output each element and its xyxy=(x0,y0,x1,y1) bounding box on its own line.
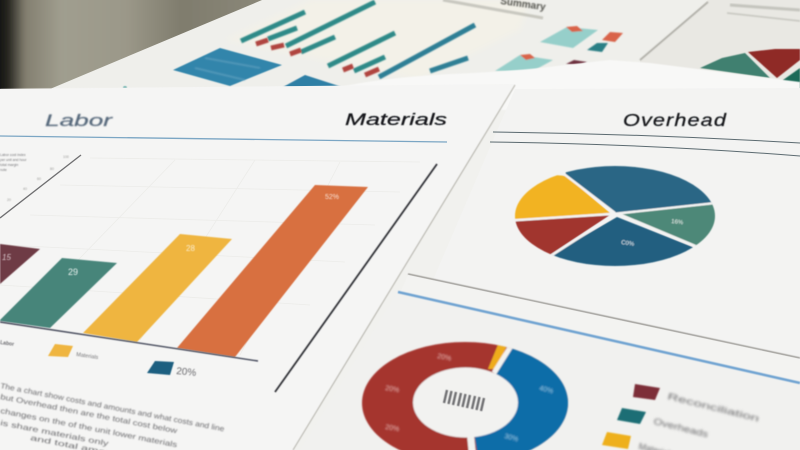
bar value: green: 29 xyxy=(68,267,78,277)
bar: maroon xyxy=(0,244,40,284)
bar value: yellow: 28 xyxy=(186,244,195,253)
pie slice: blue top xyxy=(565,165,712,213)
small blue box xyxy=(283,75,342,87)
donut legend xyxy=(602,384,760,450)
panel: back right sheet xyxy=(640,0,800,90)
small pale teal charts xyxy=(495,26,623,71)
y axis tick labels: 60 xyxy=(37,177,41,181)
pie slice: red xyxy=(515,214,610,255)
panel: middle sheet xyxy=(0,60,800,110)
legend label blue: 20% xyxy=(176,366,197,379)
x axis xyxy=(0,322,258,361)
body text paragraph xyxy=(0,381,225,450)
small teal dot xyxy=(123,86,127,90)
bar value: maroon: 15 xyxy=(2,253,11,262)
pie label green: 16% xyxy=(671,219,684,226)
donut chart xyxy=(360,340,570,450)
panel: bottom sheet xyxy=(360,275,800,450)
blue callout box xyxy=(173,48,282,86)
pie slice: green xyxy=(622,204,716,246)
legend swatch teal xyxy=(617,408,646,424)
y axis note text xyxy=(0,153,27,172)
panel: back left sheet xyxy=(50,0,800,100)
bar chart xyxy=(0,185,368,361)
grouped bar chart: teal bars xyxy=(241,2,475,77)
body text paragraph: is share materials only xyxy=(0,418,110,448)
blue header rule xyxy=(398,292,800,383)
legend swatch blue xyxy=(147,361,174,375)
overhead title: Overhead xyxy=(623,110,727,130)
donut label blue: 40% xyxy=(538,385,554,396)
grouped bar chart: red bars xyxy=(256,40,379,75)
legend label yellow: Materials xyxy=(76,352,99,361)
y axis tick labels: 20 xyxy=(7,198,11,202)
overhead pie chart xyxy=(514,165,716,267)
divider line dark xyxy=(275,164,437,392)
materials title: Materials xyxy=(345,111,447,129)
body text paragraph: changes on the of the unit lower materials xyxy=(0,406,178,449)
y axis xyxy=(0,155,81,218)
bar: green xyxy=(0,258,117,328)
chart grid xyxy=(0,158,420,355)
y axis tick labels: 40 xyxy=(23,187,27,191)
back sheet heading rule xyxy=(443,0,543,18)
table background xyxy=(0,0,290,105)
y axis note text: note xyxy=(0,168,7,172)
panel: front left sheet xyxy=(0,84,515,450)
bar: yellow xyxy=(83,234,232,342)
sheet divider line xyxy=(408,274,800,358)
donut label red lower: 20% xyxy=(385,385,400,394)
overhead header rules xyxy=(490,132,800,156)
bar: orange xyxy=(177,185,368,357)
panel: overhead sheet xyxy=(408,88,800,359)
donut label red: 20% xyxy=(437,353,452,363)
pie label blue: C0% xyxy=(621,240,635,248)
donut label red bottom: 20% xyxy=(385,424,400,433)
y axis note text: per unit and hour xyxy=(0,158,27,162)
bar value: orange: 52% xyxy=(325,194,339,201)
donut label blue lower: 30% xyxy=(503,433,519,444)
blue header rule xyxy=(0,136,447,142)
legend swatch gold xyxy=(602,432,631,449)
legend label left: Labor xyxy=(0,340,14,348)
back sheet grid shading xyxy=(225,0,530,80)
legend swatch maroon xyxy=(633,384,660,400)
y axis tick labels: 80 xyxy=(50,167,54,171)
legend swatch yellow xyxy=(48,344,73,357)
chart legend xyxy=(0,340,197,379)
body text paragraph: The a chart show costs and amounts and what costs and line xyxy=(0,381,225,433)
y axis note text: total margin xyxy=(0,163,18,167)
pie slice: dark blue xyxy=(552,216,694,267)
pie slice: yellow xyxy=(514,174,610,220)
back right pie chart xyxy=(700,49,800,90)
labor title: Labor xyxy=(45,112,114,130)
y axis note text: Labor cost index xyxy=(0,153,26,157)
body text paragraph: but Overhead then are the total cost below xyxy=(0,392,179,435)
legend label maroon: Reconciliation xyxy=(667,391,760,424)
legend label teal: Overheads xyxy=(653,416,710,440)
y axis tick labels: 100 xyxy=(63,155,69,159)
y axis tick labels xyxy=(7,155,69,202)
back right sheet text lines xyxy=(727,5,800,21)
barcode in donut centre xyxy=(444,390,484,411)
